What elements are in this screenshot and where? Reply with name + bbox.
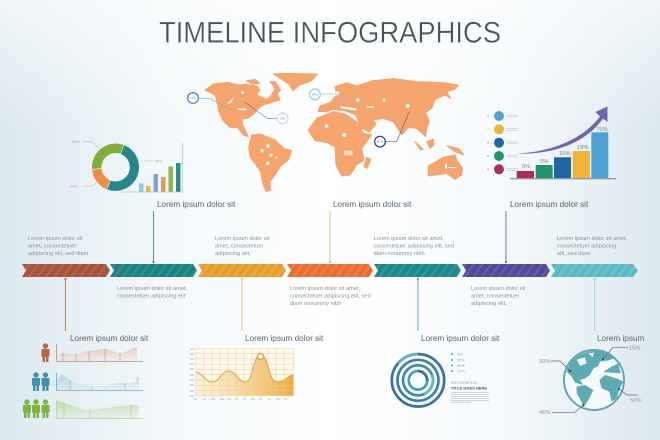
globe labels: 50% [630,398,641,404]
timeline descriptions: Lorem ipsum dolor sit amet, [557,236,628,242]
map callout values: 25% [280,116,286,120]
timeline descriptions: adipiscing elit, sed diam [28,251,89,257]
timeline ribbon [22,264,638,277]
timeline descriptions: amet, consectetuer [28,244,76,250]
map pins and icons [241,91,456,169]
rings legend and text: 5% [457,352,463,356]
map callout circles [188,89,385,147]
globe callouts [551,347,638,412]
timeline descriptions: Lorem ipsum dolor sit amet, [374,236,444,242]
area chart 2 [56,373,143,390]
map continents [205,73,464,192]
timeline descriptions: Lorem ipsum dolor sit [471,286,526,292]
rings legend and text: 25% [457,358,465,362]
globe labels: 45% [539,410,550,416]
timeline descriptions: Lorem ipsum dolor sit [215,236,270,242]
legend [487,111,518,174]
timeline descriptions: amet, consectetuer [215,244,263,250]
donut labels: 50% [155,160,163,164]
donut labels [70,140,163,188]
map inland seas [227,97,357,111]
headings below timeline: Lorem ipsum dolor sit [70,334,149,343]
headings above timeline: Lorem ipsum dolor sit [333,200,412,209]
timeline descriptions [28,236,628,307]
title: TIMELINE INFOGRAPHICS [159,16,501,50]
bars [517,171,534,178]
map callout lines [199,94,409,141]
map callout values: 60% [377,140,383,144]
globe labels: 30% [539,359,550,365]
growth bar chart [487,106,616,179]
headings above timeline: Lorem ipsum dolor sit [510,200,589,209]
rings legend and text: 75% [457,370,465,374]
timeline descriptions: adipiscing elit, [215,251,251,257]
rings legend and text: INFOGRAPHIC [451,381,478,385]
timeline descriptions: Lorem ipsum dolor sit amet, [117,286,188,292]
world map [188,73,464,192]
donut and bar chart [70,140,182,192]
area chart 3 [56,400,143,418]
headings below timeline: Lorem ipsum dolor sit [421,334,500,343]
headings above timeline: Lorem ipsum dolor sit [157,200,236,209]
bar value labels: 75% [596,127,608,133]
person icon row 3 [23,399,50,418]
donut labels: 20% [70,184,78,188]
globe labels: 15% [629,346,640,352]
timeline descriptions: diam nonummy nibh [374,251,425,257]
headings below timeline: Lorem ipsum [597,334,645,343]
timeline descriptions: elit, sed diam [557,251,591,257]
timeline descriptions: consectetuer adipiscing elit, sed [290,294,371,300]
globe labels [539,346,641,416]
person icon row 1 [42,343,50,362]
timeline descriptions: Lorem ipsum dolor sit [28,236,83,242]
small bars [120,143,182,192]
donut chart [92,143,139,191]
bar value labels [522,127,608,170]
rings legend and text: TITLE GOES HERE [451,386,487,390]
timeline descriptions: consectetuer adipiscing elit, sed [374,244,454,250]
rings legend and text [451,352,489,402]
map callout values [190,92,383,144]
people area charts [23,343,143,418]
timeline descriptions: diam nonummy nibh [290,301,341,307]
background top fade [0,0,660,130]
concentric rings chart [392,354,444,406]
person icon row 2 [32,372,50,391]
timeline descriptions: adipiscing elit, [471,301,507,307]
headings above timeline [157,200,589,209]
amber wave chart [190,348,294,399]
timeline descriptions: amet, consectetuer [471,294,519,300]
map callout values: 54% [312,92,318,96]
area chart 1 [56,344,143,362]
globe [539,346,641,416]
bar value labels: 9% [540,159,548,165]
timeline descriptions: Lorem ipsum dolor sit amet, [290,286,361,292]
arrow [517,106,608,154]
rings legend and text: 50% [457,364,465,368]
donut labels: 30% [72,140,80,144]
globe landmass [567,351,623,407]
timeline descriptions: consectetuer adipiscing [557,244,616,250]
headings below timeline: Lorem ipsum dolor sit [245,334,324,343]
timeline descriptions: consectetuer adipiscing elit [117,294,186,300]
map callout values: 70% [190,96,196,100]
bar value labels: 5% [522,164,530,170]
headings below timeline [70,334,645,343]
bar value labels: 15% [559,151,571,157]
connectors [64,211,596,331]
bar value labels: 18% [577,145,589,151]
